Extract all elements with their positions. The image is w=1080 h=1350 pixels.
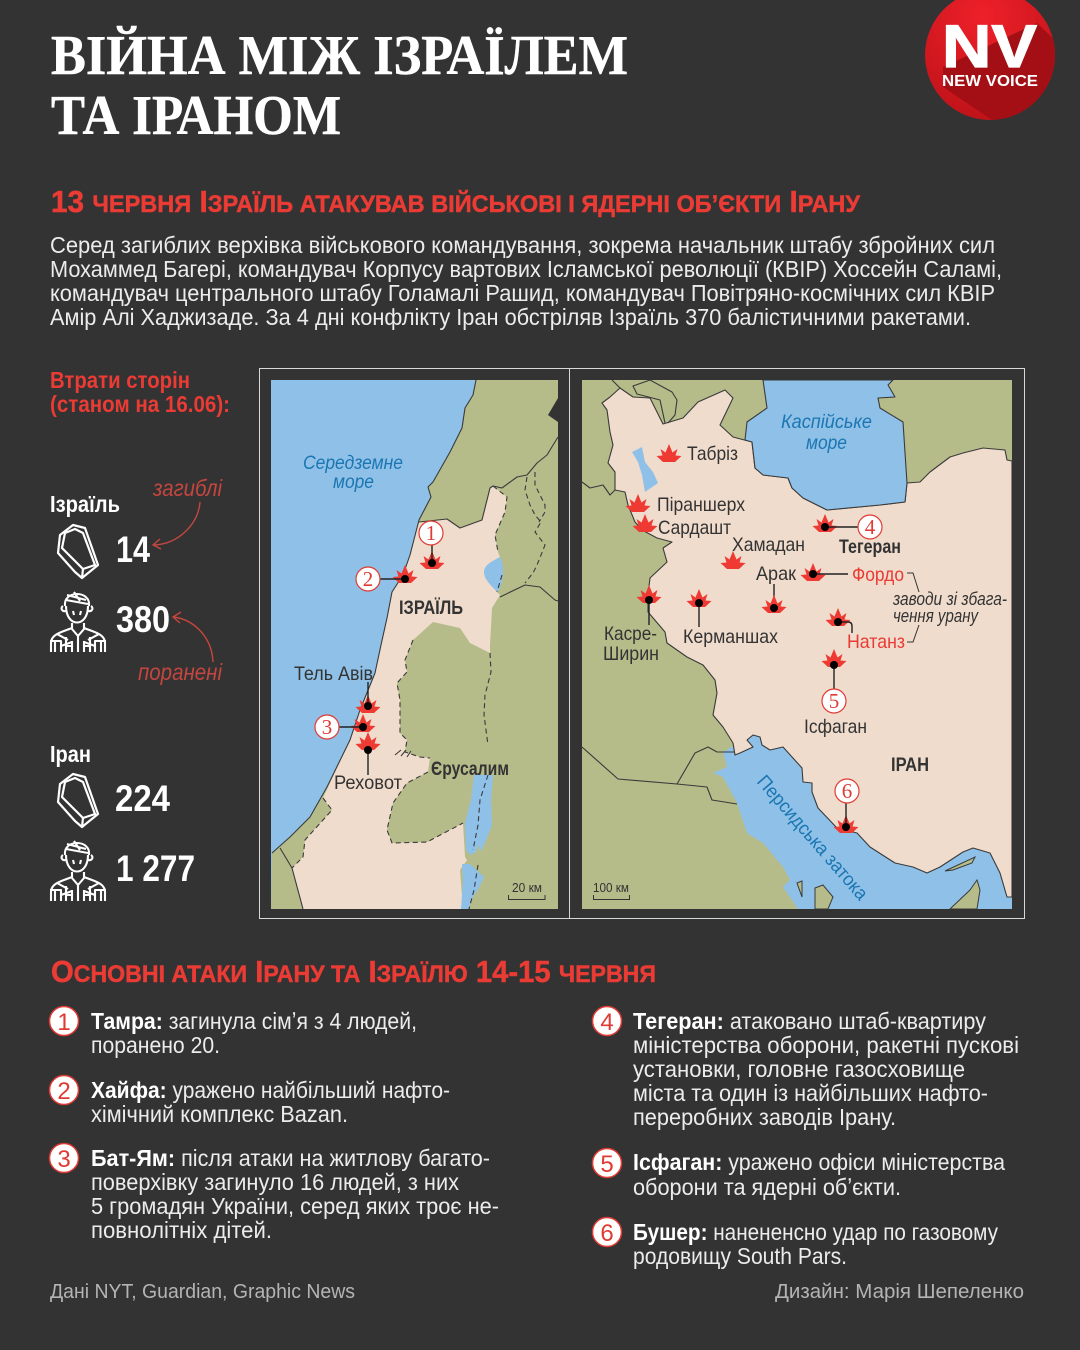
number: Israel wounded: 380	[116, 599, 170, 640]
sea label: Caspian: море	[806, 432, 847, 454]
footer: design credit: Дизайн: Марія Шепеленко	[775, 1281, 1024, 1303]
marker 2: Haifa: 2	[363, 567, 373, 591]
list item 3: Bat Yam	[50, 1144, 499, 1243]
map frame	[260, 368, 1024, 919]
marker 4: Tehran	[812, 514, 901, 558]
map: Iran	[582, 380, 1012, 909]
list item 1: Tamra	[50, 1006, 417, 1058]
marker: Hamadan	[720, 534, 805, 569]
marker: Arak	[756, 563, 796, 613]
heading: 13 June attack: 13 ЧЕРВНЯ ІЗРАЇЛЬ АТАКУВАВ ВІЙСЬКОВІ І ЯДЕРНІ ОБʼЄКТИ ІРАНУ	[51, 184, 861, 219]
marker: Tel Aviv: Тель Авів	[294, 663, 373, 685]
list item 5: Isfahan: 5	[600, 1151, 614, 1178]
marker: Tabriz: Табріз	[687, 443, 738, 465]
title	[51, 25, 628, 147]
marker: Qasr-e Shirin: Касре-	[604, 623, 657, 645]
number: Iran dead: 224	[115, 778, 170, 819]
marker 5: Isfahan: 5	[829, 689, 839, 713]
list item 3: Bat Yam: Бат-Ям: після атаки на житлову багато-	[91, 1145, 490, 1171]
logo: NV New Voice	[925, 0, 1062, 125]
scale bar: 20 km: 20 км	[512, 881, 542, 895]
intro text block: Амір Алі Хаджизаде. За 4 дні конфлікту Іран обстріляв Ізраїль 370 балістичними ракетами.	[50, 304, 971, 330]
marker: Piranshahr	[626, 494, 745, 516]
arrow: dead	[153, 502, 200, 549]
list item 3: Bat Yam: повнолітніх дітей.	[91, 1217, 272, 1243]
icon: coffin Israel	[58, 525, 98, 578]
number: Israel dead: 14	[116, 529, 150, 570]
sea label: Caspian: Каспійське	[781, 411, 872, 433]
list item 1: Tamra: поранено 20.	[91, 1032, 220, 1058]
sea label: Mediterranean	[303, 452, 403, 493]
list item 6: Bushehr	[592, 1218, 998, 1269]
note: wounded: поранені	[138, 659, 223, 685]
marker 3: Bat Yam	[315, 714, 376, 739]
logo: NV New Voice: NEW VOICE	[942, 73, 1038, 90]
title: ВІЙНА МІЖ ІЗРАЇЛЕМ	[51, 25, 628, 87]
marker 4: Tehran: Тегеран	[839, 536, 901, 558]
label: Israel on map: ІЗРАЇЛЬ	[399, 596, 463, 619]
marker: Tabriz	[656, 443, 738, 465]
list item 4: Tehran: 4	[600, 1009, 614, 1036]
panel: losses	[50, 367, 230, 901]
marker: Sardasht: Сардашт	[658, 517, 731, 539]
list item 4: Tehran: міста та один із найбільших нафто-	[633, 1080, 988, 1106]
icon: coffin Iran	[58, 774, 98, 827]
marker 2: Haifa	[356, 565, 418, 591]
sea label: Mediterranean: Середземне	[303, 452, 403, 474]
list item 2: Haifa	[50, 1076, 450, 1127]
scale bar: 100 km: 100 км	[593, 881, 629, 895]
logo: NV New Voice: NV	[942, 13, 1037, 80]
label: Iran on map: ІРАН	[891, 754, 929, 776]
list item 6: Bushehr: Бушер: нанененсно удар по газовому	[633, 1219, 998, 1245]
marker: Natanz: Натанз	[847, 631, 905, 653]
footer: sources: Дані NYT, Guardian, Graphic News	[50, 1281, 355, 1303]
marker: Qasr-e Shirin: Ширин	[603, 643, 659, 665]
list item 6: Bushehr: 6	[600, 1220, 614, 1247]
list item 1: Tamra: Тамра: загинула сімʼя з 4 людей,	[91, 1008, 417, 1034]
marker: Natanz	[826, 608, 905, 653]
marker 5: Isfahan: Ісфаган	[804, 716, 867, 738]
marker: Fordo	[800, 563, 904, 586]
marker: Kermanshah	[683, 589, 778, 648]
losses heading: Втрати сторін	[50, 367, 190, 393]
note: enrichment plants: чення урану	[893, 606, 979, 626]
note: enrichment plants	[892, 573, 1007, 642]
list item 6: Bushehr: родовищу South Pars.	[633, 1243, 847, 1269]
note: dead: загиблі	[152, 475, 223, 501]
marker: Rehovot: Реховот	[334, 772, 402, 794]
map: Israel	[271, 380, 558, 909]
marker: Qasr-e Shirin	[603, 585, 662, 665]
marker 4: Tehran: 4	[865, 515, 876, 539]
sea label: Persian Gulf: Персидська затока	[752, 772, 872, 905]
list item 5: Isfahan: оборони та ядерні обʼєкти.	[633, 1174, 901, 1200]
intro text block: Мохаммед Багері, командувач Корпусу вартових Ісламської революції (КВІР) Хоссейн Саламі,	[50, 256, 1002, 282]
marker: Hamadan: Хамадан	[732, 534, 805, 556]
list item 2: Haifa: 2	[57, 1078, 71, 1105]
icon: wounded person Israel	[50, 592, 106, 652]
list item 2: Haifa: Хайфа: уражено найбільший нафто-	[91, 1077, 450, 1103]
marker: Piranshahr: Піраншерх	[657, 494, 745, 516]
sea label: Caspian	[781, 411, 872, 454]
losses heading	[50, 367, 230, 417]
label: Jerusalem: Єрусалим	[431, 758, 509, 780]
marker 6: Bushehr: 6	[842, 779, 852, 803]
marker: Fordo: Фордо	[852, 564, 904, 586]
marker 5: Isfahan	[804, 649, 867, 738]
marker 6: Bushehr	[834, 779, 859, 833]
marker: Kermanshah: Керманшах	[683, 626, 778, 648]
title: ТА ІРАНОМ	[51, 85, 341, 147]
list item 3: Bat Yam: поверхівку загинуло 16 людей, з них	[91, 1169, 459, 1195]
list item 1: Tamra: 1	[57, 1009, 71, 1036]
marker: Rehovot	[334, 732, 402, 794]
list item 4: Tehran: Тегеран: атаковано штаб-квартиру	[633, 1008, 986, 1034]
list item 4: Tehran: установки, головне газосховище	[633, 1056, 965, 1082]
list item 4: Tehran	[592, 1006, 1019, 1130]
sea label: Mediterranean: море	[333, 471, 374, 493]
list item 4: Tehran: переробних заводів Ірану.	[633, 1104, 896, 1130]
note: enrichment plants: заводи зі збага-	[892, 589, 1007, 609]
list item 2: Haifa: хімічний комплекс Bazan.	[91, 1101, 348, 1127]
list item 3: Bat Yam: 5 громадян України, серед яких троє не-	[91, 1193, 499, 1219]
number: Iran wounded: 1 277	[116, 848, 195, 889]
heading: main attacks: ОСНОВНІ АТАКИ ІРАНУ ТА ІЗРАЇЛЮ 14-15 ЧЕРВНЯ	[51, 954, 656, 989]
list item 4: Tehran: міністерства оборони, ракетні пускові	[633, 1032, 1019, 1058]
intro text block: командувач центрального штабу Голамалі Рашид, командувач Повітряно-космічних сил КВІР	[50, 280, 995, 306]
intro text block	[50, 232, 1002, 330]
marker 3: Bat Yam: 3	[322, 715, 332, 739]
list item 5: Isfahan: Ісфаган: уражено офіси міністерства	[633, 1149, 1005, 1175]
list item 3: Bat Yam: 3	[57, 1146, 71, 1173]
icon: wounded person Iran	[50, 841, 106, 901]
intro text block: Серед загиблих верхівка військового командування, зокрема начальник штабу збройних сил	[50, 232, 995, 258]
arrow: wounded	[173, 612, 213, 662]
marker: Tel Aviv	[294, 663, 380, 713]
list item 5: Isfahan	[592, 1148, 1005, 1200]
marker: Sardasht	[632, 514, 731, 539]
scale bar: 20 km	[508, 881, 545, 900]
losses heading: (станом на 16.06):	[50, 391, 230, 417]
label: Iran: Іран	[50, 741, 91, 767]
label: Israel: Ізраїль	[50, 491, 120, 517]
marker 1: Tamra: 1	[426, 521, 436, 545]
marker: Arak: Арак	[756, 563, 796, 585]
marker 1: Tamra	[419, 521, 444, 569]
